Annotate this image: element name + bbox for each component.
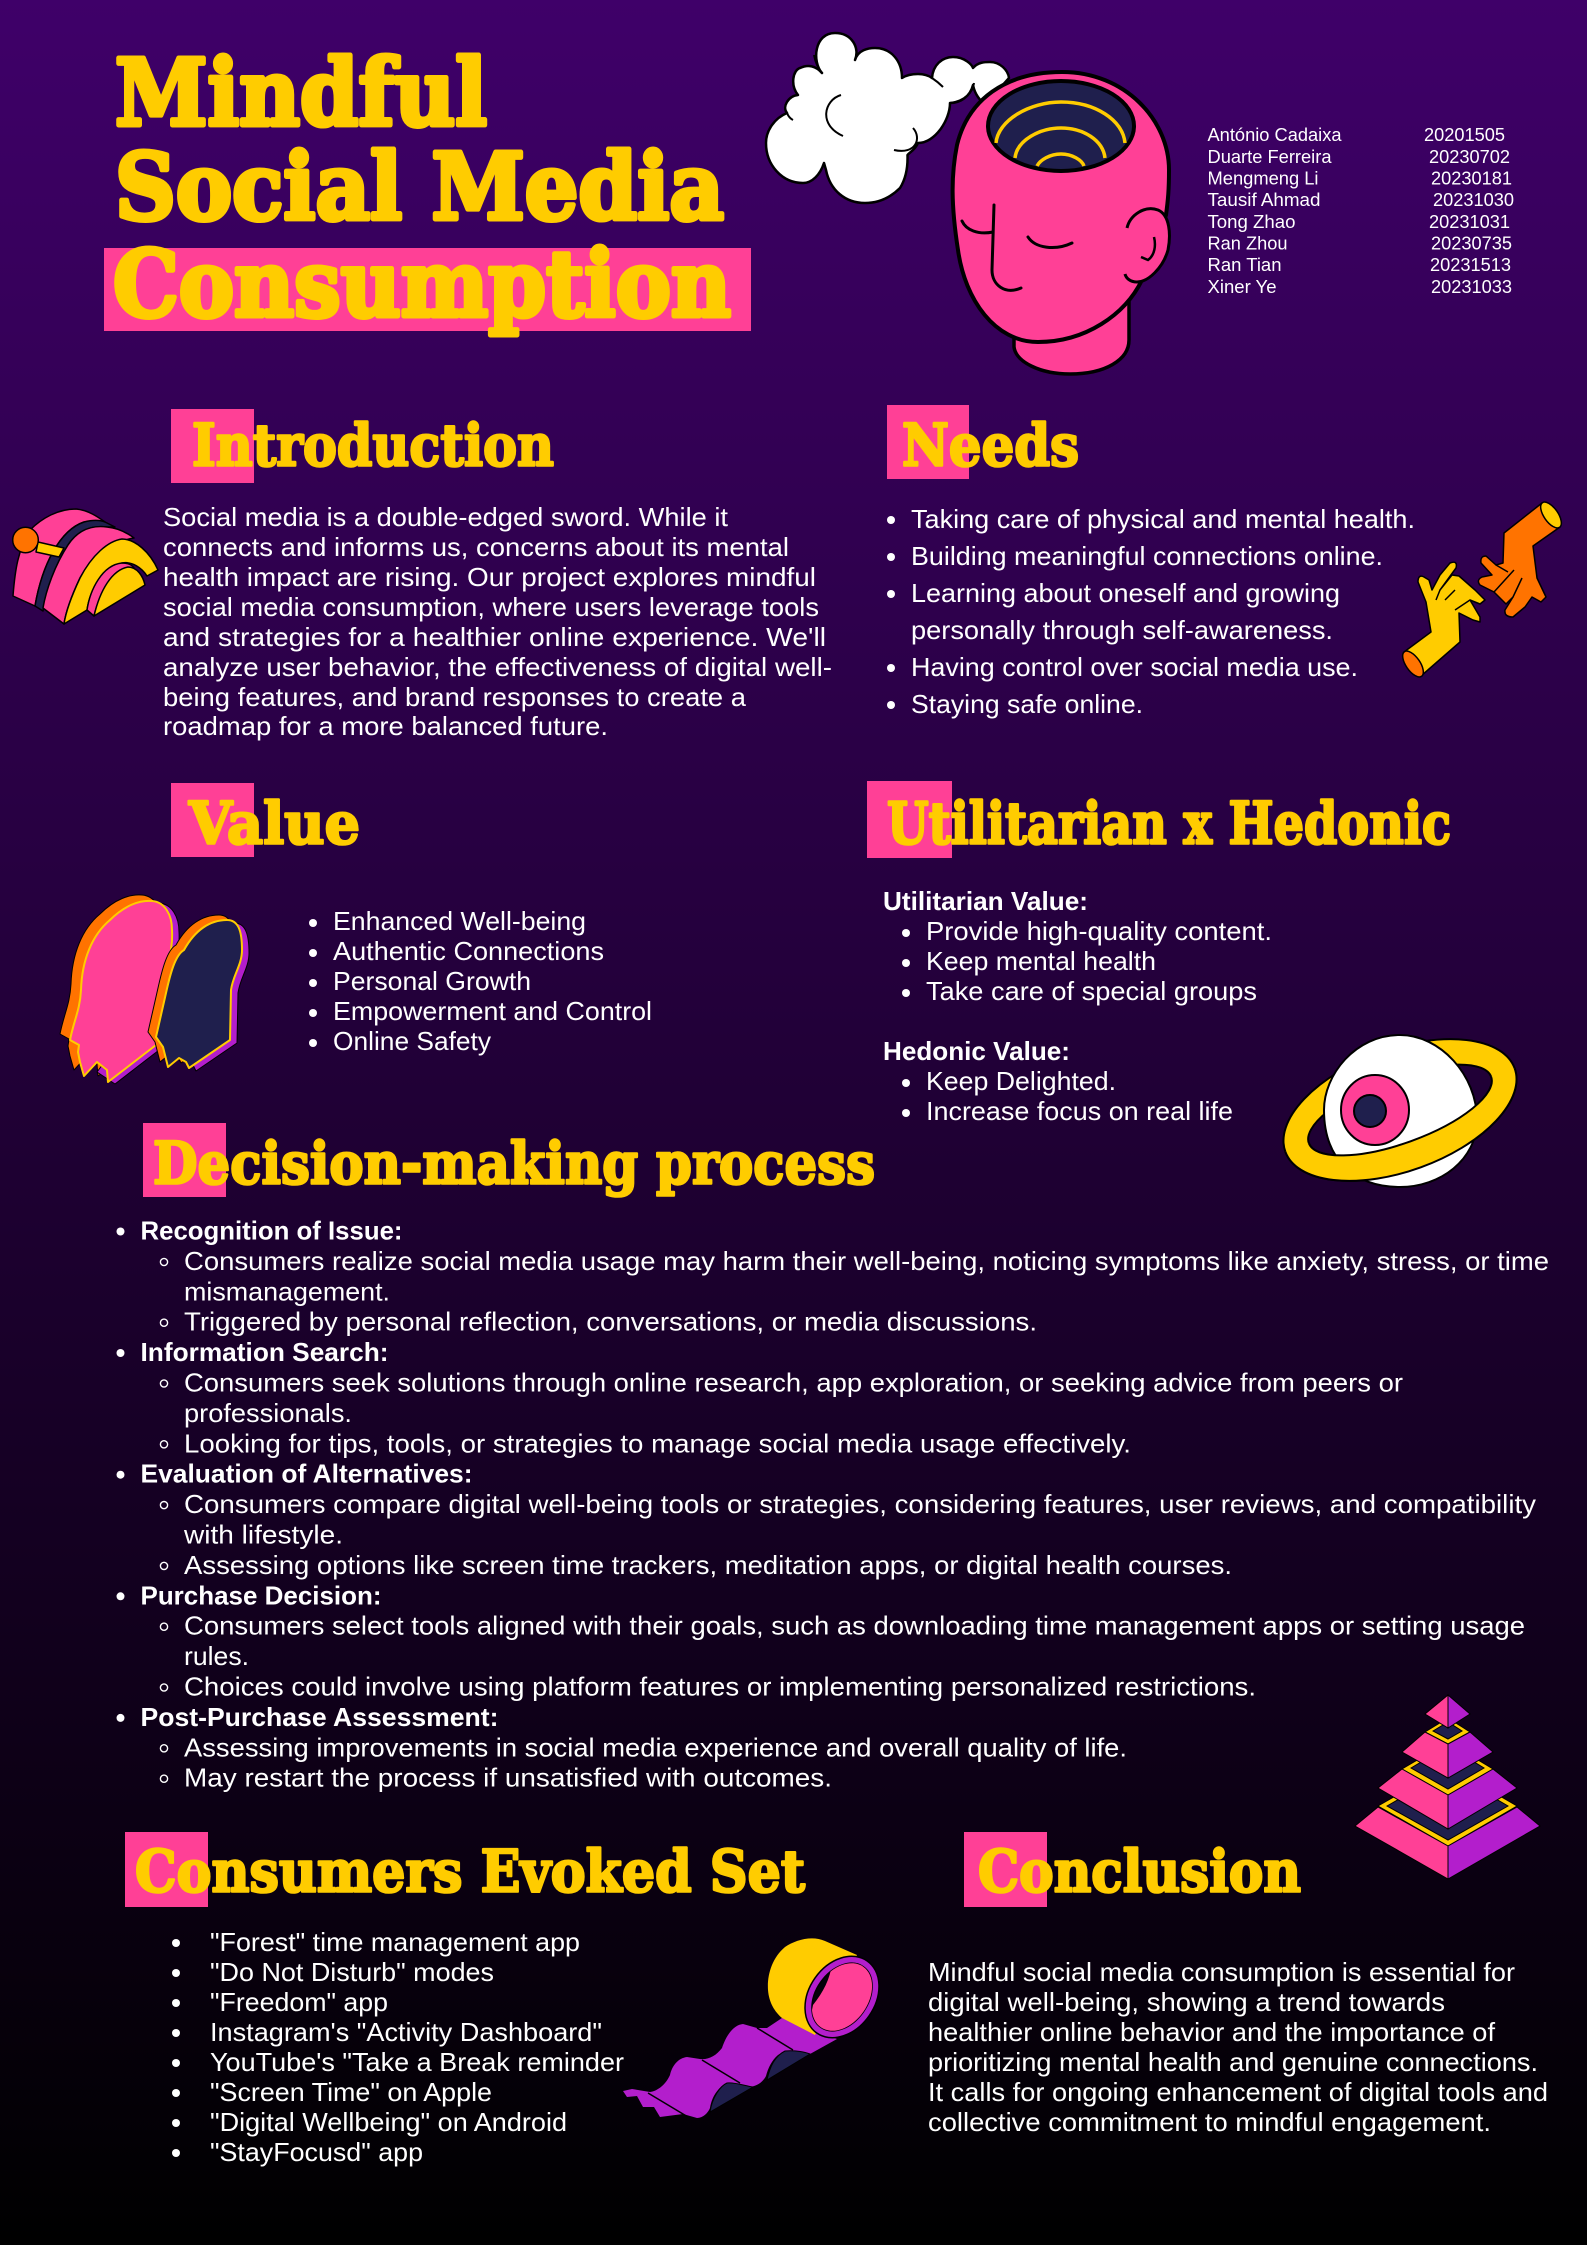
team member list: Tong Zhao	[1208, 212, 1296, 232]
text: utilitarian and hedonic values: Keep Delighted.	[926, 1066, 1116, 1096]
team member list: 20231031	[1429, 212, 1510, 232]
list: value: Enhanced Well-being	[333, 906, 586, 936]
list: needs: Having control over social media use.	[911, 652, 1358, 682]
icon: tape roll	[623, 1938, 894, 2118]
heading: Decision-making process: Decision-making process	[153, 1130, 875, 1198]
icon: isometric arches	[13, 509, 158, 624]
text: conclusion body: prioritizing mental health and genuine connections.	[928, 2047, 1538, 2077]
team member list: Xiner Ye	[1208, 277, 1276, 297]
list: needs: Learning about oneself and growing	[911, 578, 1340, 608]
icon: layered pyramid	[1355, 1695, 1540, 1879]
list: decision-making process: Looking for tips, tools, or strategies to manage social media usage effectively.	[184, 1428, 1131, 1458]
text: conclusion body: It calls for ongoing enhancement of digital tools and	[928, 2077, 1548, 2107]
heading: Value: Value	[188, 790, 360, 858]
list: decision-making process: Consumers realize social media usage may harm their well-being, noticing symptoms like anxiety, stress, or time	[184, 1246, 1549, 1276]
list: decision-making process: Consumers compare digital well-being tools or strategies, considering features, user reviews, and compatibility	[184, 1489, 1536, 1519]
list: decision-making process: Assessing options like screen time trackers, meditation apps, or digital health courses.	[184, 1550, 1232, 1580]
text: conclusion body: digital well-being, showing a trend towards	[928, 1987, 1445, 2017]
text: utilitarian and hedonic values: Utilitarian Value:	[883, 886, 1088, 916]
text: introduction body: social media consumption, where users leverage tools	[163, 592, 819, 622]
list: needs: Building meaningful connections online.	[911, 541, 1383, 571]
icon: cloud	[766, 33, 1009, 203]
list: consumers evoked set: Instagram's "Activity Dashboard"	[210, 2017, 602, 2047]
heading: Needs: Needs	[902, 412, 1079, 480]
text: introduction body: roadmap for a more balanced future.	[163, 711, 608, 741]
list: decision-making process: Assessing improvements in social media experience and overall quality of life.	[184, 1732, 1127, 1762]
team member list: Duarte Ferreira	[1208, 147, 1332, 167]
list: needs	[887, 504, 1415, 719]
list: needs: Taking care of physical and mental health.	[911, 504, 1415, 534]
team member list: Mengmeng Li	[1208, 168, 1318, 188]
list: decision-making process	[116, 1216, 1549, 1793]
team member list: 20230735	[1431, 234, 1512, 254]
team member list: Ran Tian	[1208, 255, 1282, 275]
list: value: Personal Growth	[333, 966, 531, 996]
list: consumers evoked set: "Digital Wellbeing" on Android	[210, 2107, 567, 2137]
text: introduction body	[163, 502, 832, 741]
heading: Utilitarian x Hedonic: Utilitarian x Hedonic	[887, 790, 1451, 858]
list: value: Empowerment and Control	[333, 996, 652, 1026]
text: utilitarian and hedonic values: Take care of special groups	[926, 976, 1257, 1006]
team member list: 20231513	[1430, 255, 1511, 275]
team member list: 20231033	[1431, 277, 1512, 297]
list: decision-making process: Choices could involve using platform features or implementing personalized restrictions.	[184, 1672, 1256, 1702]
text: introduction body: being features, and brand responses to create a	[163, 682, 747, 712]
title: Mindful	[115, 39, 487, 147]
list: consumers evoked set: YouTube's "Take a Break reminder	[210, 2047, 624, 2077]
list: decision-making process: with lifestyle.	[183, 1520, 343, 1550]
list: decision-making process: Purchase Decision:	[140, 1580, 382, 1610]
text: utilitarian and hedonic values	[883, 886, 1272, 1126]
list: consumers evoked set: "Do Not Disturb" modes	[210, 1957, 494, 1987]
text: utilitarian and hedonic values: Keep mental health	[926, 946, 1156, 976]
list: decision-making process: Triggered by personal reflection, conversations, or media discussions.	[184, 1307, 1037, 1337]
list: needs: Staying safe online.	[911, 689, 1143, 719]
list: decision-making process: May restart the process if unsatisfied with outcomes.	[184, 1763, 832, 1793]
list: consumers evoked set: "Forest" time management app	[210, 1927, 580, 1957]
heading: Introduction: Introduction	[192, 412, 554, 480]
list: decision-making process: Information Search:	[140, 1337, 388, 1367]
list: decision-making process: Consumers select tools aligned with their goals, such as downloading time management apps or setting usage	[184, 1611, 1525, 1641]
text: conclusion body: Mindful social media consumption is essential for	[928, 1957, 1515, 1987]
list: needs: personally through self-awareness.	[911, 615, 1333, 645]
list: value	[309, 906, 652, 1056]
list: consumers evoked set: "Freedom" app	[210, 1987, 388, 2017]
list: value: Online Safety	[333, 1026, 491, 1056]
text: utilitarian and hedonic values: Increase focus on real life	[926, 1096, 1233, 1126]
list: consumers evoked set: "Screen Time" on Apple	[210, 2077, 492, 2107]
icon: reaching hands	[1399, 499, 1565, 680]
team member list: 20201505	[1424, 125, 1505, 145]
list: decision-making process: Evaluation of Alternatives:	[140, 1459, 472, 1489]
list: decision-making process: mismanagement.	[184, 1276, 390, 1306]
title	[104, 39, 751, 338]
text: introduction body: and strategies for a healthier online experience. We'll	[163, 622, 826, 652]
list: consumers evoked set	[172, 1927, 624, 2167]
text: conclusion body	[928, 1957, 1548, 2137]
list: decision-making process: Consumers seek solutions through online research, app exploration, or seeking advice from peers or	[184, 1368, 1403, 1398]
team member list	[1208, 125, 1514, 297]
list: value: Authentic Connections	[333, 936, 604, 966]
text: introduction body: health impact are rising. Our project explores mindful	[163, 562, 816, 592]
team member list: Tausif Ahmad	[1208, 190, 1320, 210]
team member list: 20230702	[1429, 147, 1510, 167]
list: decision-making process: professionals.	[184, 1398, 352, 1428]
team member list: 20230181	[1431, 168, 1512, 188]
title: Social Media	[115, 133, 724, 241]
text: conclusion body: collective commitment to mindful engagement.	[928, 2107, 1491, 2137]
text: introduction body: connects and informs us, concerns about its mental	[163, 532, 789, 562]
icon: pink head with open top	[953, 72, 1169, 374]
heading: Conclusion: Conclusion	[978, 1838, 1301, 1906]
icon: planet eyeball	[1282, 1034, 1518, 1188]
text: conclusion body: healthier online behavior and the importance of	[928, 2017, 1496, 2047]
team member list: Ran Zhou	[1208, 234, 1288, 254]
team member list: 20231030	[1433, 190, 1514, 210]
list: decision-making process: Recognition of Issue:	[140, 1216, 402, 1246]
icon: two head silhouettes	[60, 895, 249, 1084]
list: decision-making process: Post-Purchase Assessment:	[140, 1702, 498, 1732]
text: utilitarian and hedonic values: Hedonic Value:	[883, 1036, 1070, 1066]
list: consumers evoked set: "StayFocusd" app	[210, 2137, 423, 2167]
list: decision-making process: rules.	[184, 1641, 249, 1671]
text: introduction body: Social media is a double-edged sword. While it	[163, 502, 729, 532]
text: utilitarian and hedonic values: Provide high-quality content.	[926, 916, 1272, 946]
title: Consumption	[113, 230, 731, 338]
team member list: António Cadaixa	[1208, 125, 1342, 145]
text: introduction body: analyze user behavior, the effectiveness of digital well-	[163, 652, 832, 682]
heading: Consumers Evoked Set: Consumers Evoked Set	[135, 1838, 805, 1906]
